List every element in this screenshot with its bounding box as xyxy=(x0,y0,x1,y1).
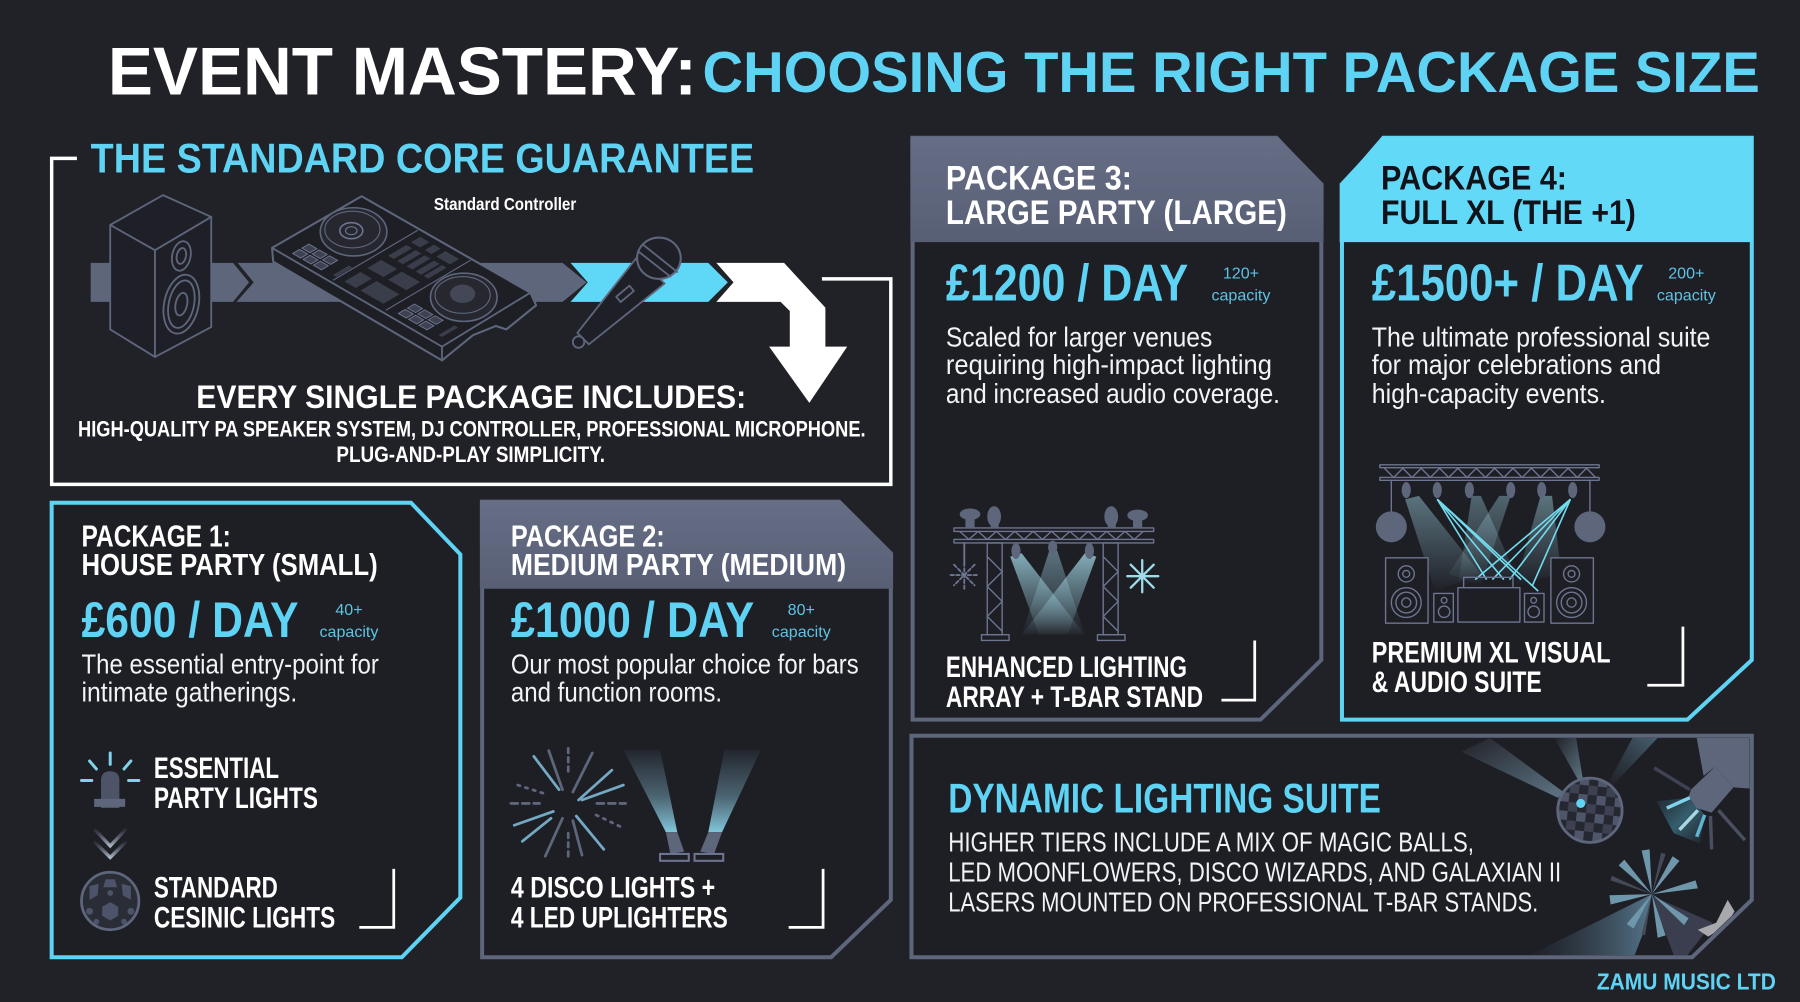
feature text: premium xl xyxy=(1372,637,1611,699)
description: for major celebrations and xyxy=(1372,349,1661,380)
feature text: standard cesinic lights: STANDARD xyxy=(154,873,278,905)
capacity: capacity xyxy=(1657,287,1716,305)
feature text: disco lights and uplighters: 4 DISCO LIGHTS + xyxy=(511,873,715,905)
feature text: enhanced lighting: ARRAY + T-BAR STAND xyxy=(946,682,1203,714)
package 4 heading: FULL XL (THE +1) xyxy=(1381,194,1636,232)
icon: cesinic ball xyxy=(82,872,139,930)
card frame xyxy=(911,736,1752,957)
title: choosing the right package size: CHOOSING THE RIGHT PACKAGE SIZE xyxy=(703,41,1760,105)
capacity xyxy=(1657,264,1716,305)
price: £1200 / DAY xyxy=(946,254,1188,312)
description xyxy=(511,649,859,707)
card frame xyxy=(52,503,460,957)
icon: disco ball xyxy=(1558,778,1622,842)
feature text: enhanced lighting xyxy=(946,652,1203,714)
core description: PLUG-AND-PLAY SIMPLICITY. xyxy=(336,442,605,467)
lighting artwork xyxy=(1461,738,1749,955)
panel: package 3 xyxy=(910,137,1324,720)
panel: package 1 xyxy=(52,503,460,957)
corner bracket xyxy=(359,869,394,927)
title: event mastery: EVENT MASTERY: xyxy=(108,35,697,110)
panel frame xyxy=(52,158,891,484)
capacity: 200+ xyxy=(1668,264,1704,282)
feature text: essential party lights: ESSENTIAL xyxy=(154,753,279,785)
icon: speaker xyxy=(110,195,211,357)
feature text: essential party lights: PARTY LIGHTS xyxy=(154,783,318,815)
price: £1000 / DAY xyxy=(511,591,754,648)
description: requiring high-impact lighting xyxy=(946,349,1272,380)
brand: zamu music ltd: ZAMU MUSIC LTD xyxy=(1597,968,1776,994)
description xyxy=(82,649,379,707)
description: The essential entry-point for xyxy=(82,649,379,680)
capacity: capacity xyxy=(320,623,378,641)
description: Our most popular choice for bars xyxy=(511,649,859,680)
feature text: premium xl: PREMIUM XL VISUAL xyxy=(1372,637,1611,669)
heading: every single package includes: EVERY SINGLE PACKAGE INCLUDES: xyxy=(196,378,746,415)
core description xyxy=(78,417,866,467)
card frame xyxy=(913,138,1321,720)
package 2 heading: PACKAGE 2: xyxy=(511,518,665,553)
capacity: capacity xyxy=(772,623,831,641)
package 3 heading: PACKAGE 3: xyxy=(946,159,1132,197)
heading: standard core guarantee: THE STANDARD CORE GUARANTEE xyxy=(91,136,754,182)
core description: HIGH-QUALITY PA SPEAKER SYSTEM, DJ CONTROLLER, PROFESSIONAL MICROPHONE. xyxy=(78,417,866,442)
heading: dynamic lighting suite: DYNAMIC LIGHTING SUITE xyxy=(948,776,1381,822)
description: LED MOONFLOWERS, DISCO WIZARDS, AND GALAXIAN II xyxy=(948,856,1561,887)
corner bracket xyxy=(1647,627,1683,685)
package 4 heading: PACKAGE 4: xyxy=(1381,159,1567,197)
description: Scaled for larger venues xyxy=(946,322,1212,353)
panel: package 2 xyxy=(480,500,893,957)
feature text: disco lights and uplighters: 4 LED UPLIGHTERS xyxy=(511,902,728,934)
capacity: capacity xyxy=(1211,287,1270,305)
icon: premium stage rig xyxy=(1376,465,1605,623)
icon: double chevron arrow xyxy=(94,829,126,857)
feature text: premium xl: & AUDIO SUITE xyxy=(1372,667,1542,699)
package 3 heading: LARGE PARTY (LARGE) xyxy=(946,194,1287,232)
panel: package 4 xyxy=(1340,137,1753,720)
feature text: essential party lights xyxy=(154,753,318,815)
icon: t-bar lighting stand xyxy=(951,506,1158,640)
description: high-capacity events. xyxy=(1372,378,1606,409)
package 2 heading: MEDIUM PARTY (MEDIUM) xyxy=(511,547,846,582)
icon: beacon light xyxy=(82,753,139,808)
icon: microphone xyxy=(573,238,681,348)
chevron flow arrow xyxy=(91,263,847,403)
package 1 heading: PACKAGE 1: xyxy=(82,518,231,553)
description xyxy=(946,322,1280,409)
price: £600 / DAY xyxy=(82,591,298,648)
corner bracket xyxy=(789,869,823,927)
header band xyxy=(480,500,893,589)
package 1 heading: HOUSE PARTY (SMALL) xyxy=(82,547,378,582)
header band xyxy=(910,137,1324,242)
description: and function rooms. xyxy=(511,676,722,707)
corner bracket xyxy=(1221,640,1255,700)
capacity: 120+ xyxy=(1223,264,1259,282)
feature text: disco lights and uplighters xyxy=(511,873,728,934)
package 4 heading xyxy=(1381,159,1636,232)
icon: dj controller xyxy=(272,196,536,360)
icon: disco burst xyxy=(511,748,626,861)
package 1 heading xyxy=(82,518,378,582)
capacity xyxy=(1211,264,1270,305)
capacity xyxy=(772,601,831,641)
capacity xyxy=(320,601,378,641)
description xyxy=(1372,322,1710,409)
panel: standard core guarantee xyxy=(52,136,891,484)
card frame xyxy=(482,502,891,957)
feature text: standard cesinic lights: CESINIC LIGHTS xyxy=(154,902,335,934)
capacity: 40+ xyxy=(335,601,363,619)
capacity: 80+ xyxy=(788,601,815,619)
description: intimate gatherings. xyxy=(82,676,297,707)
description: and increased audio coverage. xyxy=(946,378,1280,409)
panel: dynamic lighting suite xyxy=(911,736,1752,957)
package 3 heading xyxy=(946,159,1287,232)
feature text: enhanced lighting: ENHANCED LIGHTING xyxy=(946,652,1187,684)
description: The ultimate professional suite xyxy=(1372,322,1710,353)
price: £1500+ / DAY xyxy=(1372,254,1644,312)
icon: led uplighters xyxy=(623,749,761,861)
label: standard controller: Standard Controller xyxy=(434,194,577,214)
title xyxy=(108,35,1760,110)
package 2 heading xyxy=(511,518,846,582)
description xyxy=(948,827,1561,917)
description: LASERS MOUNTED ON PROFESSIONAL T-BAR STANDS. xyxy=(948,886,1538,917)
header band xyxy=(1340,137,1753,242)
description: HIGHER TIERS INCLUDE A MIX OF MAGIC BALLS, xyxy=(948,827,1474,858)
feature text: standard cesinic lights xyxy=(154,873,335,934)
card frame xyxy=(1342,138,1752,720)
